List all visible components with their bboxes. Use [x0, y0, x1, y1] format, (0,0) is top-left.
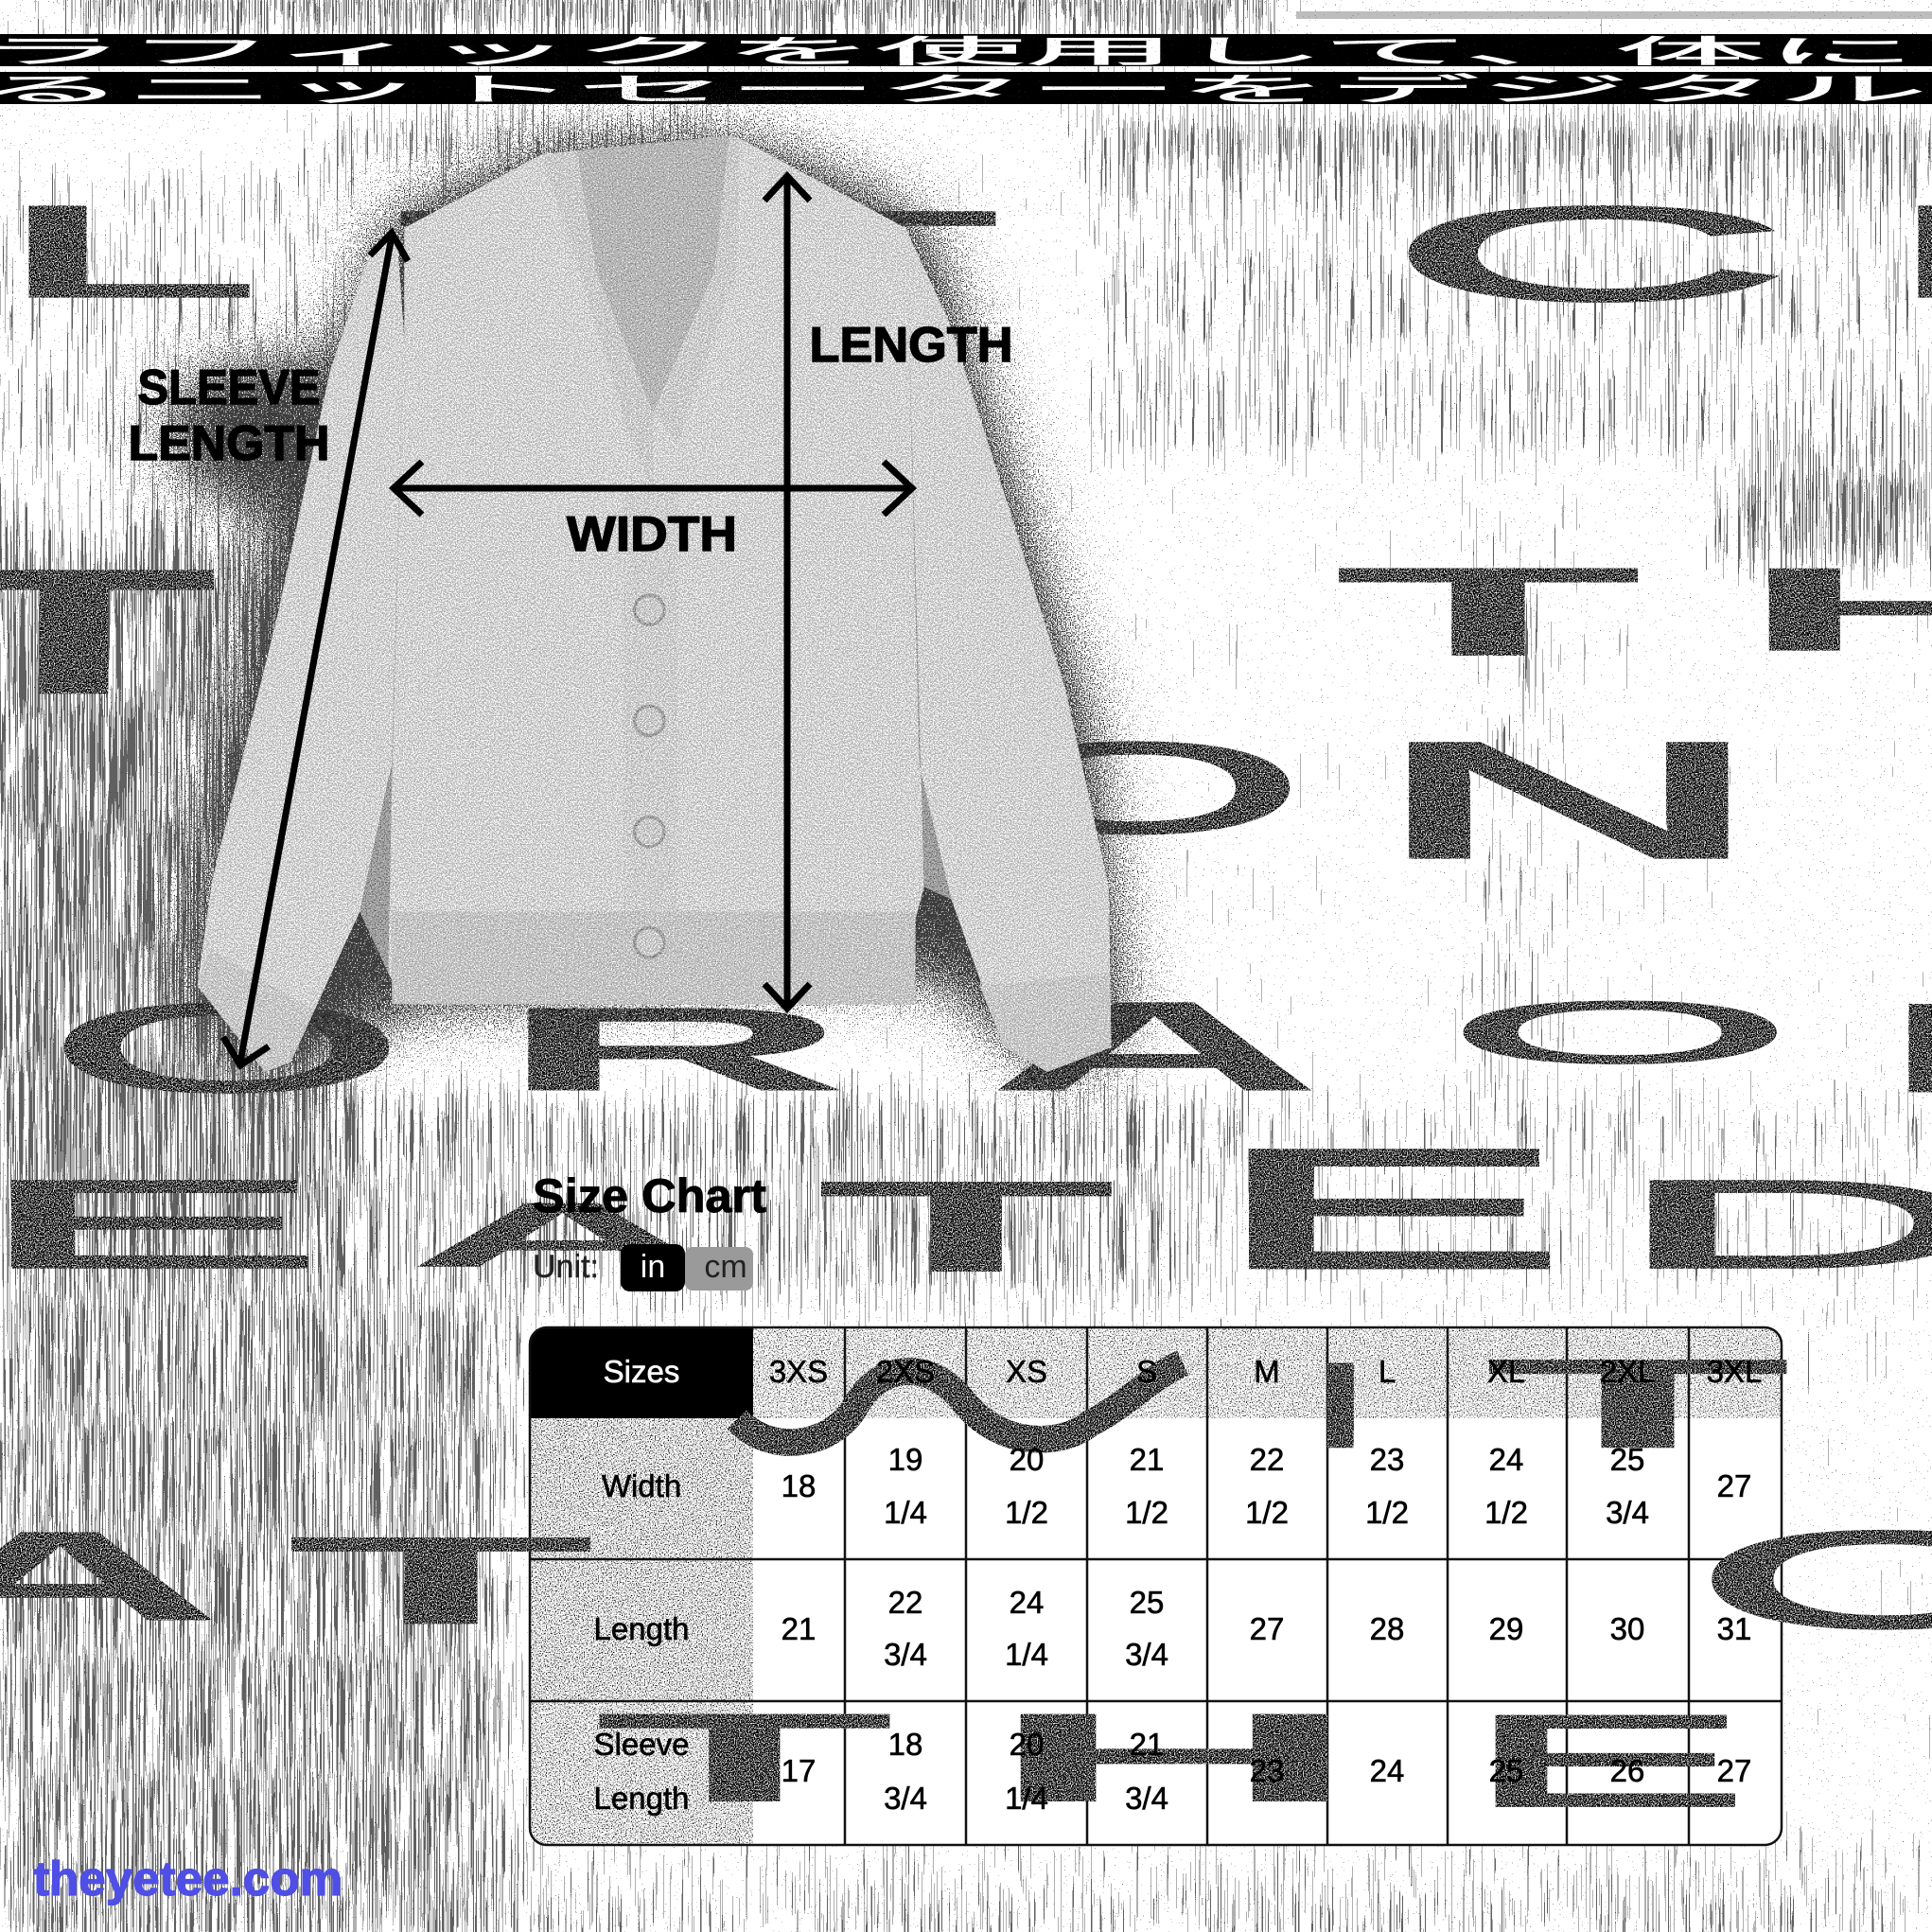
width row: 18 — [782, 1468, 816, 1503]
length row: 22 — [888, 1585, 922, 1620]
header row: L — [1379, 1354, 1396, 1389]
background stretched letters: C — [1389, 181, 1789, 327]
sleeve seams — [360, 308, 404, 974]
length row: 1/4 — [1005, 1637, 1048, 1672]
width row: 24 — [1489, 1442, 1523, 1477]
sleeve length row: Length — [594, 1781, 689, 1816]
background stretched letters: L — [0, 180, 258, 323]
width row: 25 — [1610, 1442, 1644, 1477]
length row: 25 — [1130, 1585, 1164, 1620]
neck opening — [576, 135, 729, 413]
sleeve length row: 18 — [888, 1727, 922, 1762]
header row: Sizes — [604, 1354, 679, 1389]
arrow: length — [764, 176, 810, 1009]
band: japanese text line 2: るニットセーターをデジタル — [0, 72, 1928, 107]
length row: 28 — [1370, 1611, 1404, 1646]
body — [388, 138, 924, 1004]
width row: 1/2 — [1365, 1495, 1409, 1530]
table grid — [530, 1327, 1782, 1845]
background stretched letters: O — [49, 978, 404, 1116]
width row: 27 — [1717, 1468, 1751, 1503]
width row: 19 — [888, 1442, 922, 1477]
background stretched letters: E — [1214, 1115, 1565, 1303]
letters crossing the table: H — [986, 1687, 1363, 1829]
width row — [602, 1442, 1751, 1530]
background stretched letters: A — [986, 975, 1324, 1117]
arrow: width — [394, 462, 912, 515]
collar — [542, 135, 739, 493]
label: sleeve length: LENGTH — [129, 416, 329, 471]
length row: 3/4 — [884, 1637, 927, 1672]
unit toggle: cm — [704, 1249, 747, 1285]
label: sleeve length: SLEEVE — [138, 360, 320, 415]
length row: 31 — [1717, 1611, 1751, 1646]
length row: 27 — [1250, 1611, 1284, 1646]
header row: 3XS — [769, 1354, 828, 1389]
width row: 22 — [1250, 1442, 1284, 1477]
sleeve length row: 24 — [1370, 1753, 1404, 1788]
header row: 2XL — [1600, 1354, 1655, 1389]
background stretched letters: A — [407, 1183, 718, 1287]
sleeve length row: 17 — [782, 1753, 816, 1788]
sleeve length row: 20 — [1010, 1727, 1044, 1762]
label: length: LENGTH — [810, 318, 1012, 373]
thin top stripe — [1296, 11, 1932, 19]
background stretched letters: N — [1373, 709, 1765, 891]
sleeve length row — [594, 1727, 1751, 1816]
cuffs — [197, 949, 314, 1072]
length row: Length — [594, 1611, 689, 1646]
sleeve length row: 23 — [1250, 1753, 1284, 1788]
length row: 3/4 — [1125, 1637, 1168, 1672]
sleeve length row: 1/4 — [1005, 1781, 1048, 1816]
header row: 3XL — [1707, 1354, 1762, 1389]
background stretched letters: T — [390, 183, 1007, 330]
sleeve length row: 25 — [1489, 1753, 1523, 1788]
width row: 1/4 — [884, 1495, 927, 1530]
sleeve length row: 21 — [1130, 1727, 1164, 1762]
letters crossing the table: T — [286, 1510, 596, 1651]
unit toggle: in — [641, 1249, 665, 1285]
logo: theyetee.com: theyetee.com — [33, 1852, 342, 1906]
background stretched letters: T — [816, 1153, 1116, 1299]
sleeve length row: 26 — [1610, 1753, 1644, 1788]
background stretched letters: T — [1333, 540, 1643, 682]
sleeve length row: 3/4 — [884, 1781, 927, 1816]
header row — [604, 1354, 1762, 1389]
width row: 1/2 — [1245, 1495, 1289, 1530]
label: width: WIDTH — [567, 507, 737, 562]
header row: S — [1136, 1354, 1157, 1389]
length row — [594, 1585, 1751, 1672]
arrow: sleeve length — [223, 233, 408, 1065]
width row: 21 — [1130, 1442, 1164, 1477]
length row: 30 — [1610, 1611, 1644, 1646]
letters crossing the table: T — [594, 1687, 895, 1829]
heading: size chart: Size Chart — [533, 1169, 766, 1222]
width row: 1/2 — [1005, 1495, 1048, 1530]
length row: 29 — [1489, 1611, 1523, 1646]
background stretched letters — [0, 180, 1932, 1648]
cardigan illustration — [197, 135, 1112, 1072]
letters crossing the table: T — [1484, 1331, 1792, 1475]
left sleeve — [197, 232, 407, 1072]
length row: 21 — [782, 1611, 816, 1646]
header row: XL — [1487, 1354, 1525, 1389]
length row: 24 — [1010, 1585, 1044, 1620]
unit toggle — [533, 1244, 753, 1291]
header row: 2XS — [876, 1354, 935, 1389]
letters crossing the table: E — [1467, 1690, 1747, 1833]
width row: 3/4 — [1606, 1495, 1649, 1530]
placket — [624, 493, 677, 998]
header row: M — [1254, 1354, 1280, 1389]
unit toggle: Unit: — [533, 1249, 599, 1285]
right sleeve — [905, 228, 1112, 1072]
cardigan shadow halo — [148, 123, 1140, 1097]
table cell backgrounds — [530, 1327, 1782, 1845]
label: sleeve length — [129, 360, 329, 471]
width row: 20 — [1010, 1442, 1044, 1477]
letters crossing the table: I — [1315, 1337, 1366, 1474]
background stretched letters: O — [1449, 984, 1791, 1080]
width row: Width — [602, 1468, 681, 1503]
background stretched letters: R — [496, 983, 852, 1116]
background stretched letters: O — [969, 717, 1304, 859]
width row: 23 — [1370, 1442, 1404, 1477]
hem rib — [392, 912, 916, 1004]
letters crossing the table — [286, 1331, 1932, 1833]
size table — [286, 1327, 1932, 1845]
width row: 1/2 — [1125, 1495, 1168, 1530]
width row: 1/2 — [1484, 1495, 1528, 1530]
sleeve length row: 27 — [1717, 1753, 1751, 1788]
band: japanese text line 1: ラフィックを使用して、体に — [0, 34, 1916, 69]
sleeve length row: 3/4 — [1125, 1781, 1168, 1816]
buttons — [635, 595, 664, 957]
header row: XS — [1006, 1354, 1047, 1389]
sleeve length row: Sleeve — [594, 1727, 689, 1762]
